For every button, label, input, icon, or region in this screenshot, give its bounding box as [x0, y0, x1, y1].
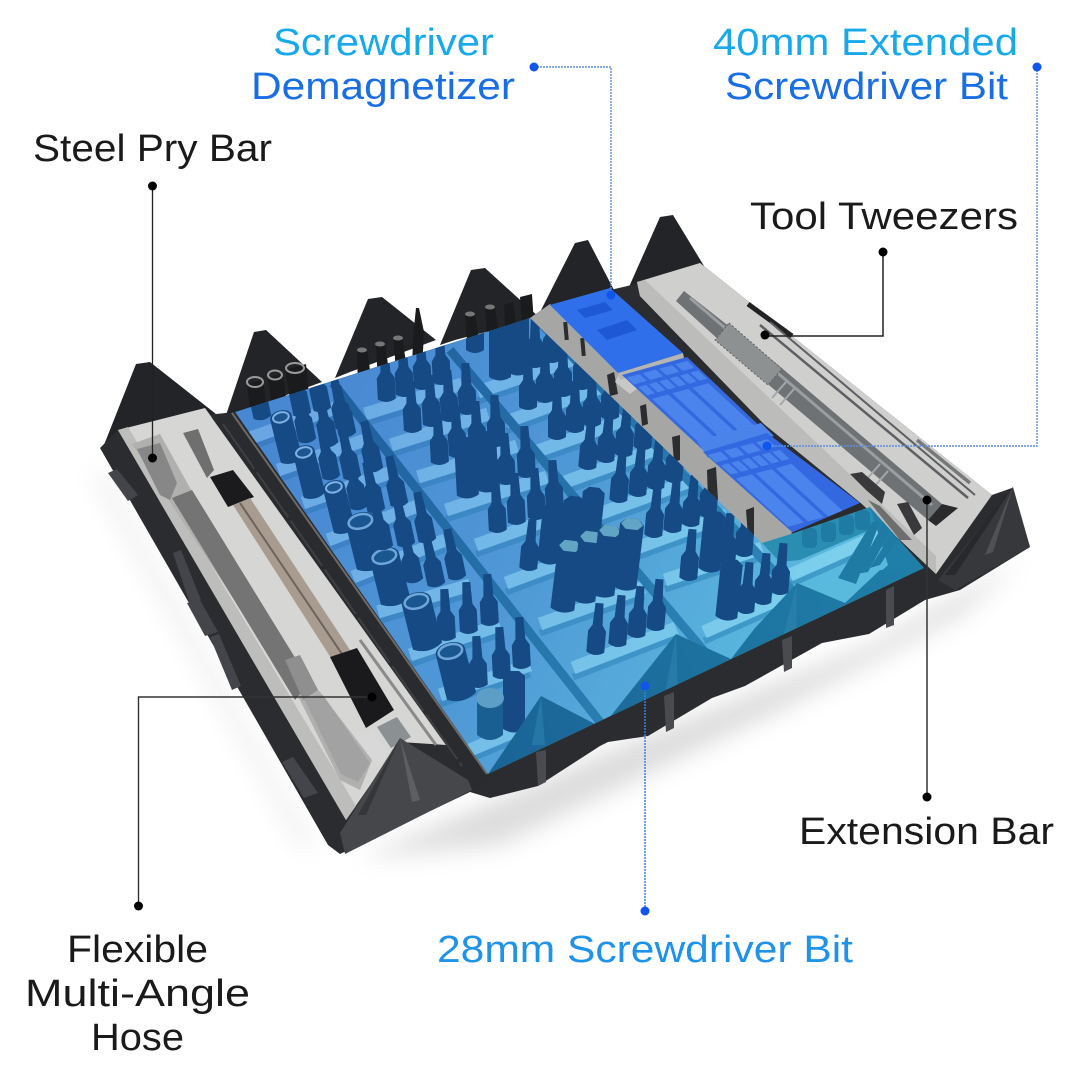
center gray divider strip — [530, 304, 795, 546]
callout: Tool Tweezers — [750, 196, 1018, 340]
teal over gray walls at right end — [762, 507, 884, 562]
callout: 40mm Extended Screwdriver Bit: 40mm Extended — [713, 22, 1018, 64]
panel: right tool compartment — [637, 263, 992, 574]
lower triangular end flap, left compartment — [340, 738, 472, 854]
icon: screwdriver demagnetizer block — [550, 288, 684, 380]
callout: Flexible Multi-Angle Hose: Flexible — [67, 929, 208, 971]
tray separators — [333, 322, 827, 722]
right corner dark teal — [870, 507, 924, 570]
callout: 40mm Extended Screwdriver Bit — [713, 22, 1042, 450]
small socket bits behind the overlay at the top — [247, 294, 534, 424]
callout: Extension Bar — [799, 496, 1054, 853]
right triangular end flap — [938, 487, 1030, 590]
folded triangular end flaps, top row — [102, 215, 704, 450]
callout: Flexible Multi-Angle Hose: Multi-Angle — [25, 973, 250, 1015]
extension bar handle — [676, 291, 958, 526]
tab clips on left edge — [108, 469, 318, 798]
latch clips — [850, 472, 922, 540]
flexible multi-angle hose — [183, 429, 411, 768]
callout: Flexible Multi-Angle Hose — [25, 692, 376, 1059]
steel pry bar — [137, 443, 370, 782]
bits: tray 1 — [243, 359, 531, 732]
callout: Screwdriver Demagnetizer: Demagnetizer — [251, 66, 515, 108]
callout: Steel Pry Bar — [33, 128, 272, 462]
overlay base — [235, 318, 924, 774]
callout: Tool Tweezers: Tool Tweezers — [750, 196, 1018, 238]
callout: Steel Pry Bar: Steel Pry Bar — [33, 128, 272, 170]
callout: 40mm Extended Screwdriver Bit: Screwdriver Bit — [725, 66, 1008, 108]
bits: tray 4 — [802, 510, 902, 584]
lower wall ribs — [536, 586, 894, 786]
panel: blue 40mm bit holders — [622, 357, 862, 536]
black hinge between left compartment and foam tray — [212, 411, 490, 792]
panel surface — [118, 408, 446, 820]
bits: tray 2 — [375, 333, 668, 656]
tray base body — [100, 263, 1030, 854]
callout: Screwdriver Demagnetizer — [251, 22, 616, 300]
drop shadow under tray — [92, 470, 1020, 858]
lower wall band and folded triangles under overlay — [488, 568, 924, 774]
tool tweezers — [748, 304, 975, 498]
callout: Extension Bar: Extension Bar — [799, 811, 1054, 853]
foam step shade — [250, 369, 880, 759]
callout: 28mm Screwdriver Bit — [437, 682, 853, 971]
large socket with light top — [476, 688, 504, 740]
callout: Screwdriver Demagnetizer: Screwdriver — [273, 22, 494, 64]
callout: Flexible Multi-Angle Hose: Hose — [91, 1017, 184, 1059]
foam steps — [250, 360, 880, 750]
panel: left tool compartment — [118, 408, 446, 820]
callout: 28mm Screwdriver Bit: 28mm Screwdriver Bit — [437, 929, 853, 971]
foam bit tray with blue overlay — [235, 301, 924, 774]
bits: tray 3 — [466, 301, 792, 622]
